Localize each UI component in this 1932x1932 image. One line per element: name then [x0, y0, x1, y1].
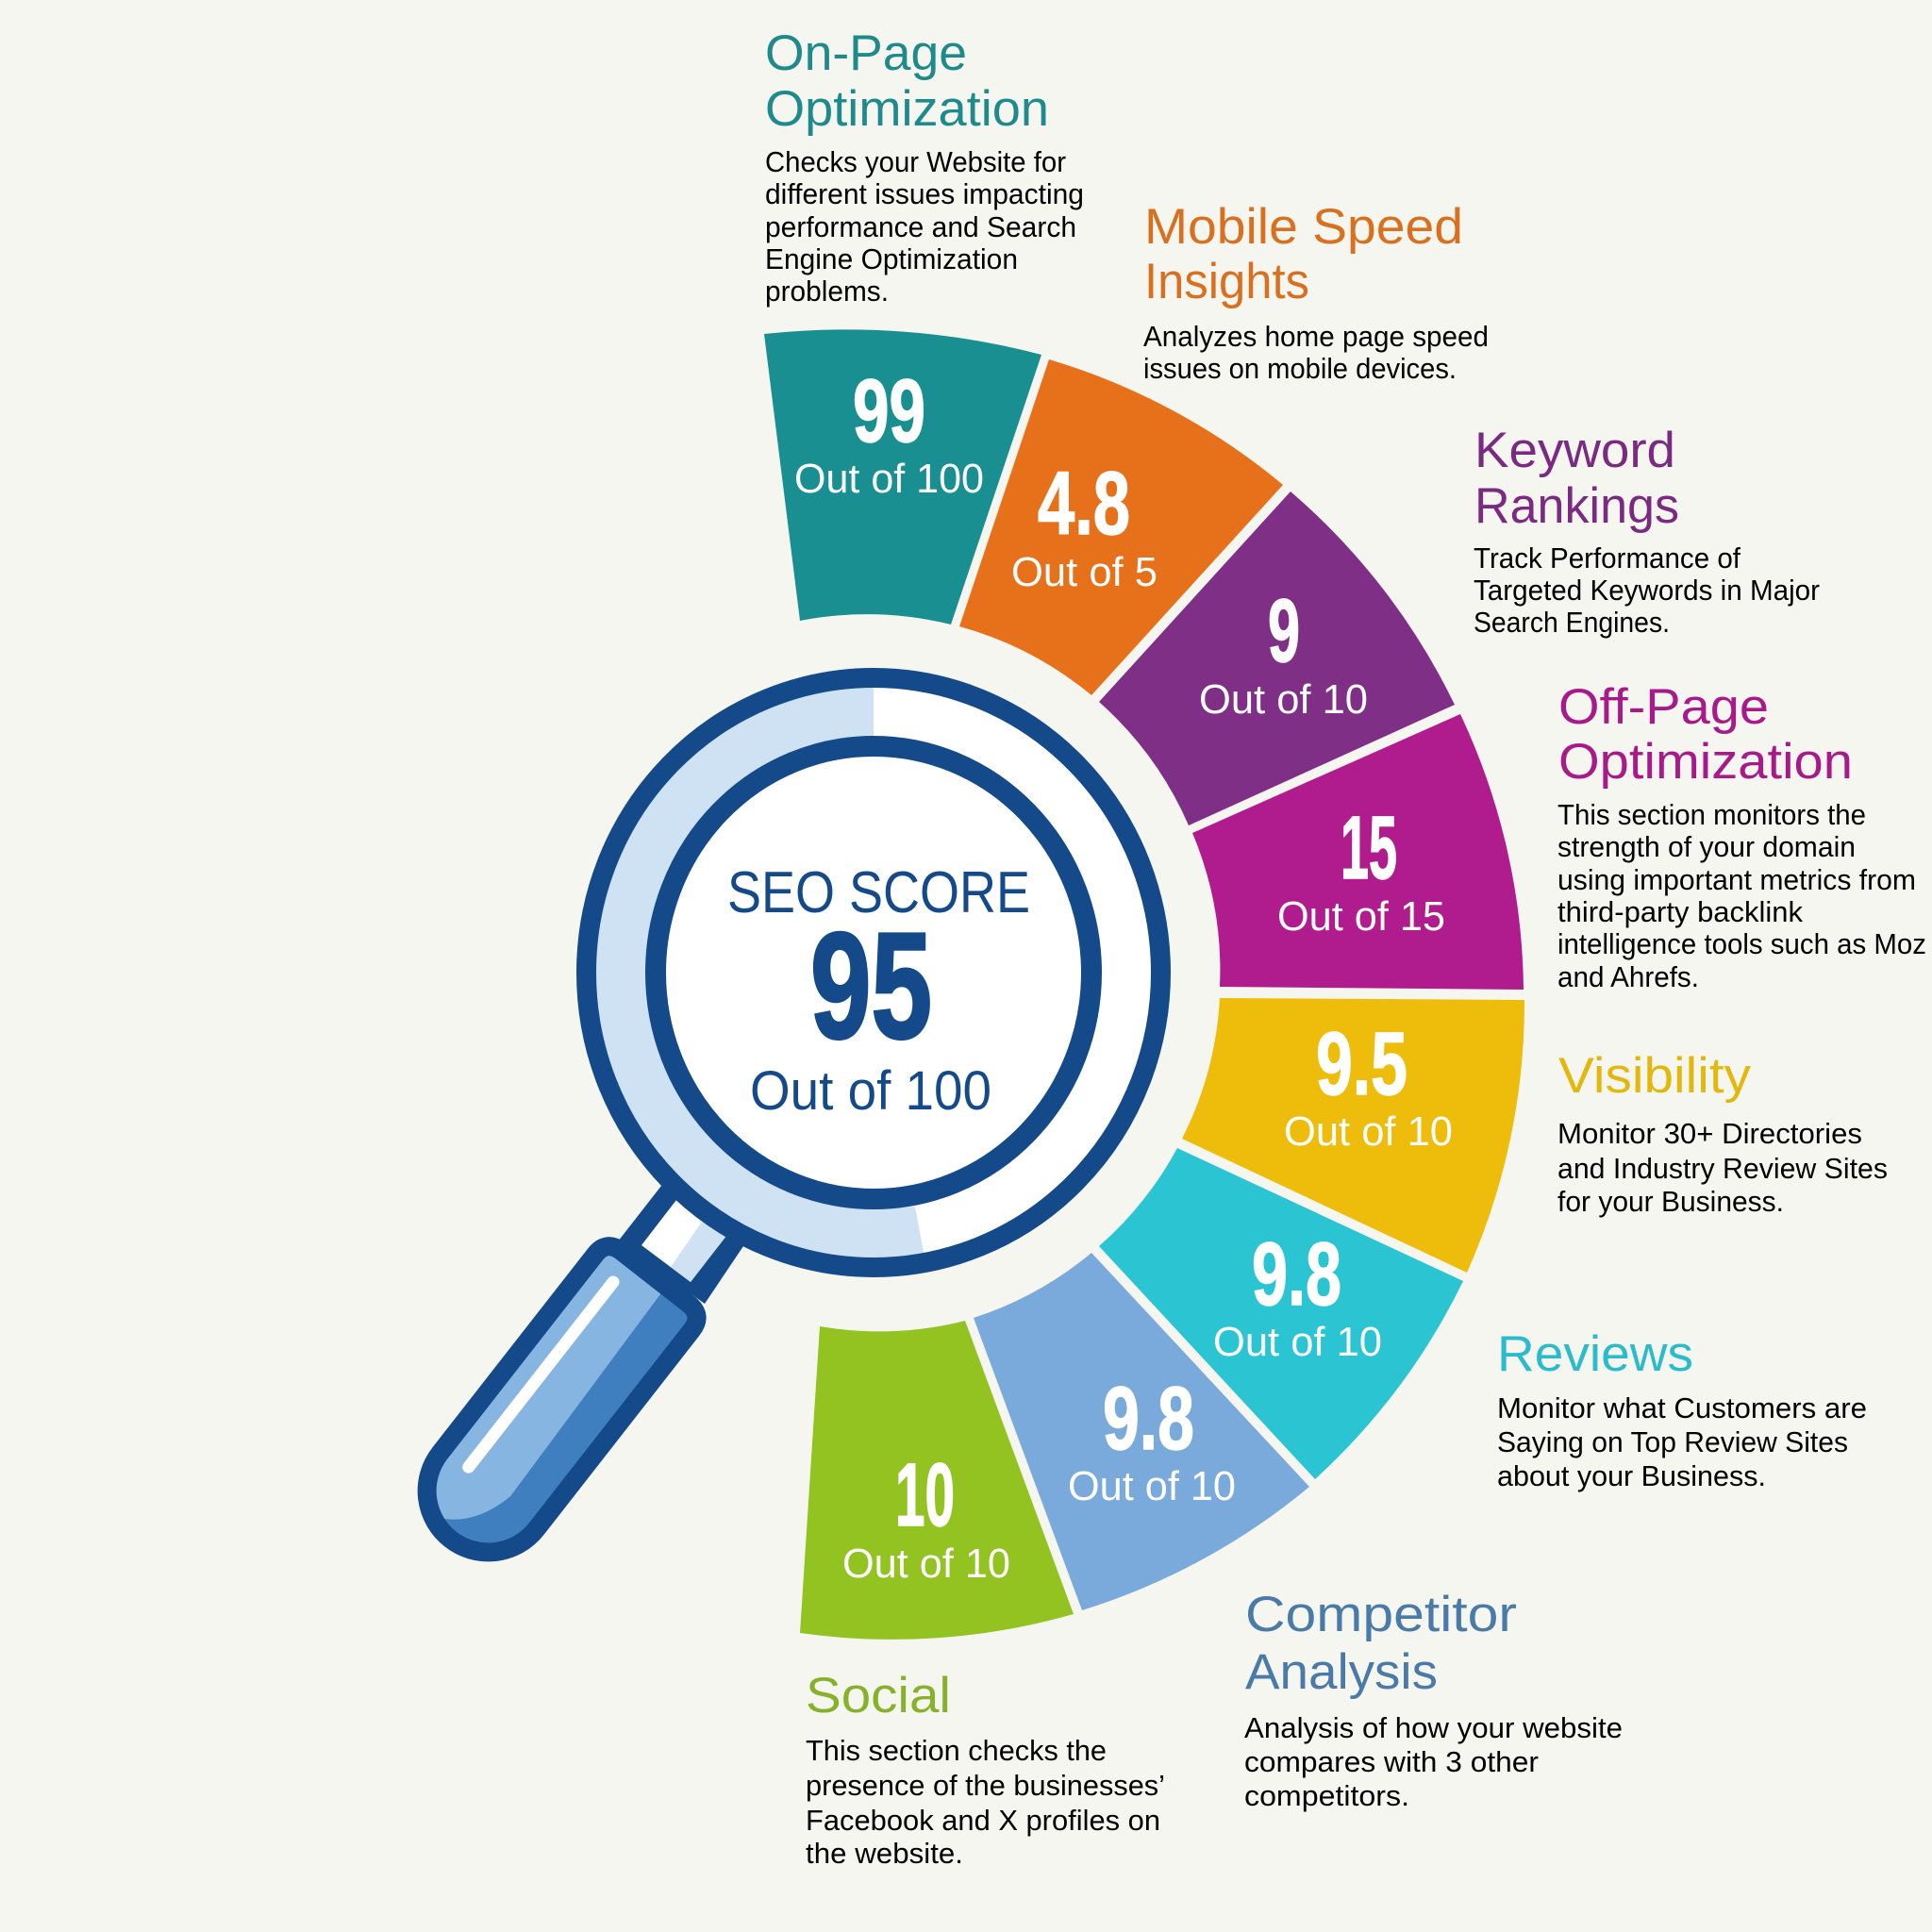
heading: Reviews — [1497, 1326, 1693, 1382]
description: Analyzes home page speed — [1143, 320, 1489, 353]
description: Search Engines. — [1474, 606, 1670, 639]
description: This section monitors the — [1557, 798, 1866, 831]
description: and Industry Review Sites — [1557, 1152, 1888, 1185]
description: about your Business. — [1497, 1459, 1766, 1492]
segment: Social score: Out of 10 — [842, 1541, 1010, 1587]
segment: Visibility score: Out of 10 — [1284, 1108, 1453, 1155]
heading: Competitor — [1245, 1587, 1517, 1642]
description: compares with 3 other — [1244, 1745, 1539, 1778]
description — [1497, 1391, 1867, 1492]
heading: Keyword — [1474, 423, 1675, 478]
segment: Mobile Speed score: 4.8 — [1038, 454, 1130, 554]
heading — [1474, 423, 1679, 534]
heading: Analysis — [1245, 1644, 1438, 1700]
segment: Reviews score — [1099, 1148, 1463, 1479]
description: Facebook and X profiles on — [806, 1804, 1160, 1837]
segment: Keyword Rankings score — [1099, 491, 1455, 825]
heading — [1245, 1587, 1517, 1700]
heading: Optimization — [1558, 734, 1853, 790]
heading: Rankings — [1474, 478, 1679, 534]
description — [1557, 798, 1926, 993]
description: Monitor 30+ Directories — [1557, 1117, 1862, 1150]
magnifier neck — [618, 1186, 743, 1304]
description: competitors. — [1244, 1779, 1409, 1812]
heading — [765, 25, 1049, 137]
segment: On-Page score: Out of 100 — [794, 456, 984, 502]
description: for your Business. — [1557, 1185, 1784, 1218]
heading: Visibility — [1558, 1048, 1752, 1104]
text block: Keyword Rankings — [1474, 423, 1820, 639]
segment: Competitor Analysis score: 9.8 — [1103, 1369, 1194, 1469]
text block: Visibility — [1557, 1048, 1888, 1218]
segment: Keyword Rankings score: 9 — [1268, 581, 1300, 681]
segment: Competitor Analysis score — [974, 1253, 1309, 1610]
segment: Competitor Analysis score: Out of 10 — [1068, 1463, 1236, 1509]
description — [765, 145, 1084, 308]
heading: Social — [806, 1668, 951, 1724]
segment: Mobile Speed score: Out of 5 — [1011, 549, 1158, 595]
description: using important metrics from — [1557, 863, 1916, 896]
segment: Social score: 10 — [895, 1445, 955, 1545]
description: This section checks the — [806, 1734, 1107, 1767]
description: the website. — [806, 1837, 963, 1870]
segment: Reviews score: Out of 10 — [1213, 1319, 1382, 1365]
segment: On-Page score — [764, 329, 1041, 625]
description: Analysis of how your website — [1244, 1711, 1623, 1744]
description: Checks your Website for — [765, 145, 1066, 178]
description — [1143, 320, 1489, 385]
description — [1474, 541, 1820, 639]
heading — [1144, 199, 1463, 309]
heading — [1558, 679, 1853, 790]
segment: Keyword Rankings score: Out of 10 — [1199, 676, 1368, 723]
description: Track Performance of — [1474, 541, 1740, 575]
heading: Insights — [1144, 254, 1309, 309]
text block: Mobile Speed Insights — [1143, 199, 1489, 385]
description: performance and Search — [765, 210, 1076, 243]
description: strength of your domain — [1557, 830, 1856, 863]
description — [1244, 1711, 1623, 1812]
segment: Mobile Speed score — [959, 359, 1283, 695]
description: issues on mobile devices. — [1143, 352, 1457, 385]
text block: On-Page Optimization — [765, 25, 1084, 308]
segment: Off-Page score — [1192, 714, 1524, 990]
heading: Mobile Speed — [1144, 199, 1463, 255]
segment: Visibility score — [1182, 998, 1524, 1273]
heading: On-Page — [765, 25, 967, 81]
description: Targeted Keywords in Major — [1474, 574, 1820, 607]
heading: Off-Page — [1558, 679, 1769, 735]
segment: Reviews score: 9.8 — [1252, 1224, 1341, 1324]
magnifier lens ring — [582, 677, 1160, 1268]
segment: Off-Page score: Out of 15 — [1277, 893, 1445, 940]
text block: Competitor Analysis — [1244, 1587, 1623, 1812]
text block: Reviews — [1497, 1326, 1867, 1492]
description: and Ahrefs. — [1557, 960, 1699, 993]
description: Saying on Top Review Sites — [1497, 1425, 1848, 1458]
description: presence of the businesses’ — [806, 1769, 1165, 1802]
text block: Social — [806, 1668, 1165, 1870]
center score text: Out of 100 — [750, 1060, 991, 1122]
description — [1557, 1117, 1888, 1218]
description: Engine Optimization — [765, 242, 1018, 275]
segment: On-Page score: 99 — [853, 361, 925, 461]
magnifier handle — [417, 1237, 707, 1562]
description: problems. — [765, 275, 889, 308]
heading: Optimization — [765, 81, 1049, 137]
center score text: SEO SCORE — [727, 860, 1030, 925]
description — [806, 1734, 1165, 1870]
center score text — [727, 860, 1030, 1122]
segment: Off-Page score: 15 — [1341, 798, 1397, 898]
center score text: 95 — [810, 901, 932, 1070]
segment: Visibility score: 9.5 — [1316, 1014, 1407, 1114]
icon: magnifying glass — [398, 677, 1160, 1577]
text block: Off-Page Optimization — [1557, 679, 1926, 993]
segment: Social score — [800, 1321, 1074, 1640]
description: third-party backlink — [1557, 895, 1803, 928]
description: Monitor what Customers are — [1497, 1391, 1867, 1424]
description: different issues impacting — [765, 177, 1084, 210]
